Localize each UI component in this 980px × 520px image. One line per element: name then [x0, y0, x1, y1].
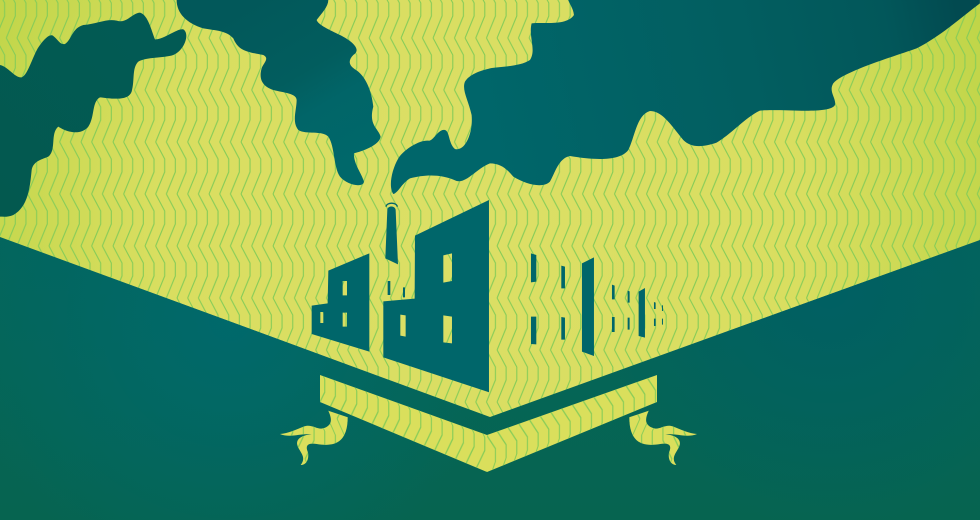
smoke cloud: middle — [177, 0, 381, 185]
factory — [312, 200, 663, 392]
smoke cloud: chimney plume and large right cloud — [391, 0, 980, 194]
ribbon tail: right — [629, 411, 697, 465]
building: left block — [312, 253, 369, 352]
chimney — [385, 203, 398, 264]
ribbon tail: left — [280, 411, 348, 465]
small distant windows behind chimney — [388, 281, 405, 297]
ribbon band — [320, 375, 657, 472]
building: main block — [383, 200, 489, 392]
smoke cloud: left — [0, 13, 186, 217]
ribbon banner — [280, 375, 697, 472]
ground: dark chevron field — [0, 237, 980, 520]
fading windows to the right — [531, 253, 663, 356]
